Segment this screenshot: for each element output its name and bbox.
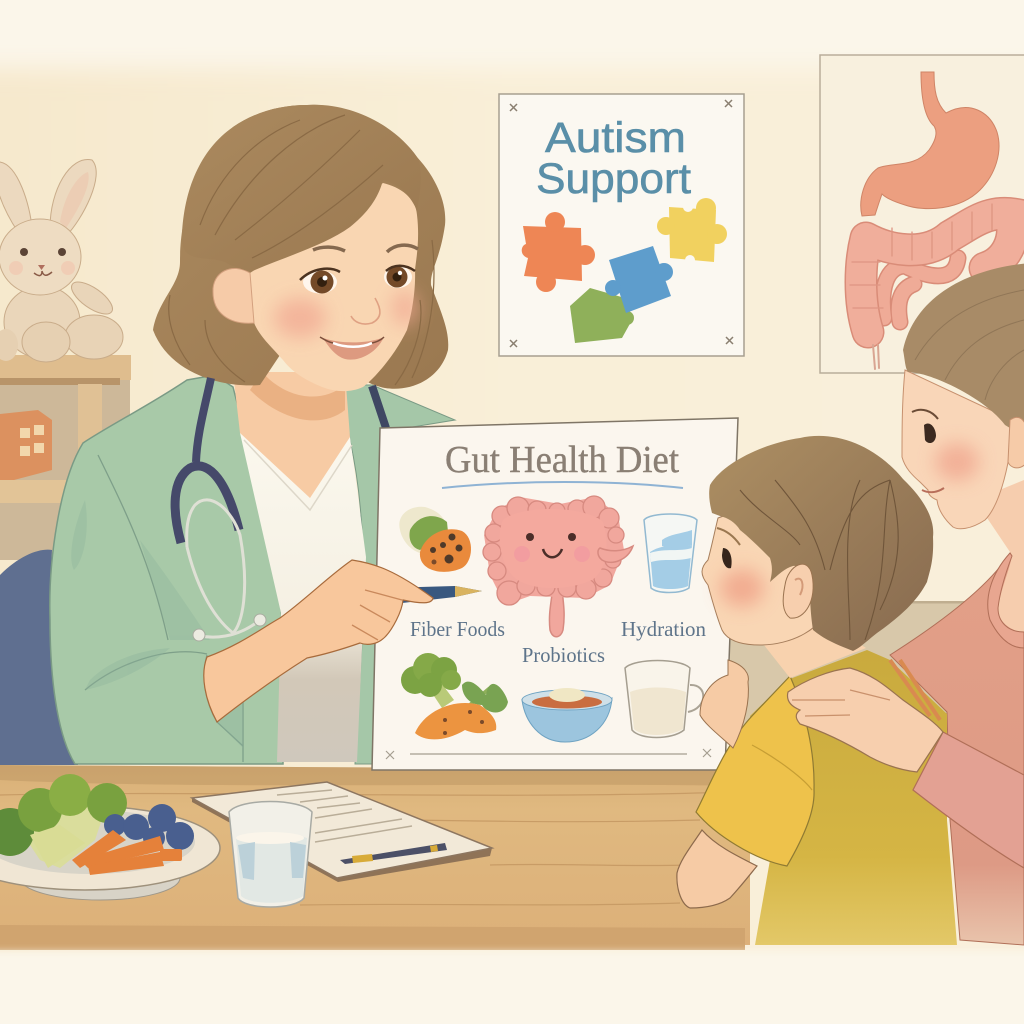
coat bbox=[50, 375, 283, 764]
poster title: Gut Health Diet bbox=[445, 439, 679, 481]
broccoli bbox=[0, 774, 127, 868]
head bbox=[702, 513, 830, 645]
collar bbox=[988, 553, 1024, 648]
doctor bbox=[50, 105, 455, 764]
face bbox=[902, 370, 1012, 529]
child's hand holding poster bbox=[700, 660, 748, 748]
poster labels: Fiber Foods bbox=[410, 617, 505, 641]
sleeve folds bbox=[85, 455, 243, 762]
shelf with toys bbox=[0, 355, 131, 560]
stethoscope bbox=[175, 378, 386, 641]
strap bbox=[890, 660, 940, 720]
poster heading bbox=[536, 114, 691, 203]
faded bottom edge bbox=[0, 952, 1024, 1024]
icon: fiber foods top bbox=[399, 507, 471, 572]
arm bbox=[677, 830, 757, 908]
pen bbox=[385, 586, 482, 603]
mother's sleeve bbox=[913, 732, 1024, 868]
corner marks bbox=[386, 749, 711, 759]
hair bbox=[903, 263, 1024, 440]
table bbox=[0, 765, 750, 950]
chair bbox=[0, 550, 78, 765]
stomach bbox=[861, 72, 999, 216]
icon: puzzle pieces bbox=[522, 198, 727, 343]
shirt bbox=[240, 433, 366, 762]
eye bbox=[924, 423, 936, 443]
hair bbox=[709, 436, 933, 651]
icon: vegetables bottom bbox=[401, 653, 508, 739]
carrots bbox=[72, 830, 182, 875]
poster heading: Support bbox=[536, 155, 691, 203]
sleeve shading bbox=[71, 500, 243, 748]
neck bbox=[760, 625, 866, 678]
icon: bowl bbox=[522, 688, 612, 742]
mother bbox=[890, 263, 1024, 945]
ear bbox=[213, 268, 254, 323]
ear bbox=[1008, 417, 1024, 468]
nose and mouth bbox=[320, 298, 384, 360]
intestines bbox=[850, 204, 1024, 369]
child bbox=[677, 436, 1024, 945]
brows bbox=[313, 245, 418, 252]
ear bbox=[783, 564, 813, 618]
icon: milk mug bottom bbox=[625, 660, 703, 738]
plate with food bbox=[0, 774, 220, 900]
clipboard with notes bbox=[192, 782, 492, 882]
poster: Autism Support bbox=[499, 94, 744, 356]
poster heading: Autism bbox=[545, 114, 686, 162]
hair back bbox=[153, 105, 448, 389]
pen bbox=[340, 843, 447, 864]
poster labels: Probiotics bbox=[522, 643, 605, 667]
poster labels: Hydration bbox=[621, 617, 706, 641]
torso bbox=[750, 650, 957, 945]
icon: plush bunny bbox=[0, 160, 123, 362]
hair strands bbox=[169, 115, 434, 385]
sweater bbox=[890, 545, 1024, 945]
face bbox=[250, 183, 418, 391]
mother's hand on shoulder bbox=[788, 668, 943, 772]
glass of milk bbox=[229, 802, 312, 907]
icon: smiling intestine bbox=[483, 496, 633, 637]
doctor arm, hand and pen bbox=[204, 560, 482, 722]
fringe bbox=[182, 105, 421, 272]
poster labels bbox=[410, 617, 706, 667]
eyes bbox=[300, 266, 415, 294]
neck bbox=[975, 480, 1024, 632]
diet poster bbox=[372, 418, 738, 770]
poster: anatomy of stomach and intestines bbox=[820, 55, 1024, 373]
icon: water glass top bbox=[644, 514, 697, 592]
neck bbox=[233, 372, 350, 498]
icon: toy block bbox=[0, 410, 52, 480]
arm and hand bbox=[204, 560, 433, 722]
blueberries bbox=[104, 804, 194, 850]
sleeve bbox=[696, 676, 814, 866]
